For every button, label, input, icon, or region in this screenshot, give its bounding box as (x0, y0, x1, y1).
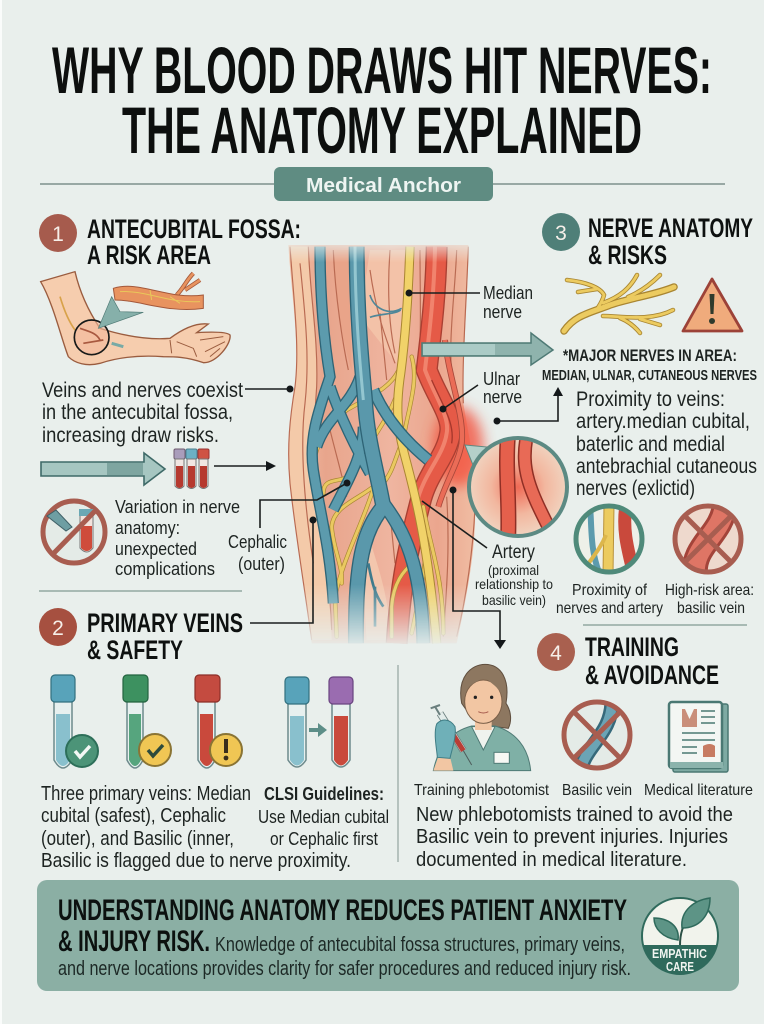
text: veins and nerves (42, 379, 294, 447)
heading 2 (87, 608, 243, 665)
text: variation in nerve anatomy: anatomy: (115, 518, 180, 538)
text: three primary veins: cubital (safest), Cephalic (41, 805, 226, 827)
text: training description (416, 804, 733, 871)
heading 1 (87, 214, 301, 270)
icon: arm with zoom on elbow (41, 272, 230, 365)
arrow: artery to training (450, 486, 506, 649)
heading 3: & RISKS (588, 240, 667, 270)
panel: section 1 antecubital fossa (39, 214, 301, 579)
central illustration: arm anatomy (288, 245, 483, 643)
badge 1: 1 (52, 223, 64, 246)
caption: proximity: Proximity of (572, 582, 647, 599)
callouts on anatomy (228, 283, 563, 649)
callout: median nerve (406, 283, 533, 322)
text: variation in nerve anatomy (115, 497, 240, 579)
inset: artery magnifier (465, 435, 567, 540)
connector: primary veins (250, 516, 316, 623)
text: veins and nerves: Veins and nerves coexist (42, 379, 243, 402)
arrow to anatomy (214, 461, 276, 471)
muscle bands (289, 247, 332, 640)
subtitle banner: Medical Anchor: Medical Anchor (306, 175, 461, 197)
heading 4: TRAINING (585, 632, 679, 662)
callout: cephalic: Cephalic (228, 532, 287, 552)
heading 1: ANTECUBITAL FOSSA: (87, 214, 301, 244)
text: variation in nerve anatomy: unexpected (115, 539, 197, 559)
callout: median nerve: Median (483, 283, 533, 303)
icon: nerve branches (564, 275, 674, 333)
badge 3 (542, 213, 580, 251)
text: three primary veins (41, 783, 351, 872)
badge 2 (39, 608, 77, 646)
icon: high-risk basilic (675, 505, 741, 575)
badge 4 (537, 633, 575, 671)
artery (397, 247, 462, 643)
callout: artery (422, 501, 553, 608)
text: three primary veins: Three primary veins: Median (41, 783, 251, 805)
callout: artery: relationship to (475, 576, 553, 592)
nerves (315, 247, 443, 643)
callout: ulnar nerve: Ulnar (483, 369, 520, 389)
heading 4 (585, 632, 719, 690)
captions: training icons: Basilic vein (562, 782, 632, 799)
badge: empathic care: CARE (666, 959, 694, 974)
title (52, 33, 712, 167)
caption: high risk: basilic vein (677, 600, 745, 617)
icon: medical literature book (669, 702, 728, 772)
text: three primary veins: (outer), and Basilic (inner, (41, 828, 234, 850)
heading 3 (588, 213, 753, 270)
callout: cephalic (228, 480, 350, 574)
callout: artery: Artery (492, 542, 535, 563)
text: veins and nerves: increasing draw risks. (42, 424, 219, 447)
panel: section 2 primary veins (39, 608, 389, 872)
badge 4: 4 (550, 642, 562, 665)
text: variation in nerve anatomy: Variation in nerve (115, 497, 240, 517)
heading 1: A RISK AREA (87, 240, 211, 270)
text: three primary veins: Basilic is flagged due to nerve proximity. (41, 850, 351, 872)
panel: section 4 training (414, 632, 753, 871)
callout: median nerve: nerve (483, 302, 522, 322)
badge 2: 2 (52, 617, 64, 640)
footer text: Knowledge of antecubital fossa structures, primary veins, (215, 934, 625, 956)
veins (312, 247, 428, 643)
arrow to nerve section (422, 333, 553, 365)
text: variation in nerve anatomy: complications (115, 559, 215, 579)
text: training description: New phlebotomists trained to avoid the (416, 804, 733, 826)
text: CLSI guidelines: Use Median cubital (258, 807, 389, 827)
badge: empathic care: EMPATHIC (652, 946, 708, 961)
caption: high risk (665, 582, 754, 617)
callout: ulnar nerve: nerve (483, 387, 522, 407)
icon: three blood tubes (174, 449, 209, 488)
text: proximity to veins: baterlic and medial (576, 433, 725, 456)
footer banner (37, 880, 739, 991)
text: training description: documented in medical literature. (416, 849, 687, 871)
footer text: and nerve locations provides clarity for safer procedures and reduced injury risk. (58, 958, 631, 980)
captions: training icons: Medical literature (644, 782, 753, 799)
text: CLSI guidelines: or Cephalic first (270, 829, 378, 849)
caption: proximity (556, 582, 663, 617)
captions: training icons (414, 782, 753, 799)
tube: blue safest (51, 675, 98, 768)
callout: artery: basilic vein) (482, 592, 546, 608)
icon: warning triangle (683, 279, 742, 331)
callout: artery: (proximal (488, 562, 539, 578)
footer text (58, 894, 631, 980)
panel: section 3 nerve anatomy (542, 213, 757, 617)
callout: ulnar nerve (440, 369, 522, 412)
heading 2: & SAFETY (87, 635, 183, 665)
tubes: CLSI order (285, 677, 353, 767)
caption: proximity: nerves and artery (556, 600, 663, 617)
arrow to tubes (41, 453, 165, 485)
badge 1 (39, 214, 77, 252)
callout: cephalic: (outer) (238, 554, 285, 574)
badge 3: 3 (555, 222, 567, 245)
text: proximity to veins: nerves (exlictid) (576, 477, 695, 500)
text: training description: Basilic vein to prevent injuries. Injuries (416, 826, 728, 848)
icon: phlebotomist (431, 664, 531, 771)
heading 2: PRIMARY VEINS (87, 608, 243, 638)
text: proximity to veins: Proximity to veins: (576, 388, 725, 411)
tube: green (123, 675, 171, 768)
arrow: ulnar to nerve list (494, 387, 563, 424)
text: major nerves (542, 346, 757, 384)
icon: proximity of nerves and artery (576, 505, 642, 575)
text: CLSI guidelines (258, 784, 389, 849)
icon: no basilic vein (564, 700, 630, 772)
text: CLSI guidelines: CLSI Guidelines: (264, 784, 384, 804)
text: proximity to veins (576, 388, 757, 500)
tube: red caution (195, 675, 242, 768)
captions: training icons: Training phlebotomist (414, 782, 549, 799)
icon: no needle (43, 501, 105, 563)
footer text: & INJURY RISK. (58, 925, 210, 958)
badge: empathic care (642, 898, 718, 974)
subtitle banner: Medical Anchor (40, 167, 725, 201)
text: veins and nerves: in the antecubital fossa, (42, 401, 233, 424)
